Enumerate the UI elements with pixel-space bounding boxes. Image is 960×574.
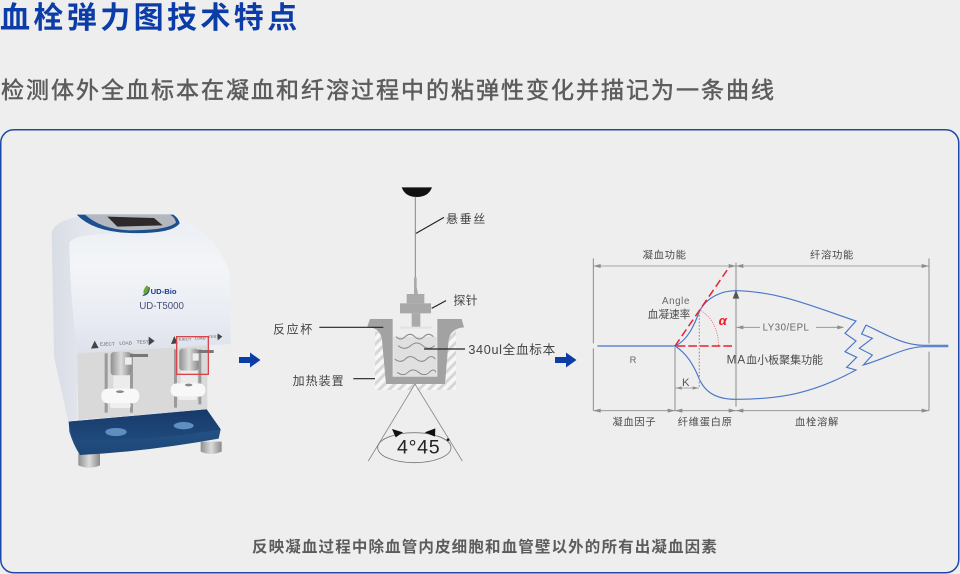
reaction cup [367,319,464,384]
label: MA platelet aggregation: MA血小板聚集功能 [727,353,823,367]
instrument shell [52,217,230,422]
label: clotting factors: 凝血因子 [612,415,656,428]
label: LY30 [737,323,844,334]
instrument screen [107,217,163,227]
instrument screen bezel [77,215,180,233]
leader: heater [353,377,375,380]
caption: 反映凝血过程中除血管内皮细胞和血管壁以外的所有出凝血因素 [252,537,718,556]
label: clot lysis: 血栓溶解 [795,415,839,428]
bottom range arrows [593,409,929,413]
alpha symbol: α [719,313,728,328]
title: 血栓弹力图技术特点 [0,2,301,35]
leader: sample [424,347,465,351]
right button labels: LOAD [195,335,206,340]
right button labels: TEST [209,334,219,339]
red highlight box [177,337,208,374]
leader: probe [432,301,446,308]
TEG curve [597,291,948,399]
right test head [171,349,214,408]
whole-blood sample [393,334,437,377]
base wells [105,422,194,436]
label: K: K [682,377,690,389]
label: probe: 探针 [453,292,478,307]
MA arrowhead [733,290,739,299]
label: angle: Angle [662,296,690,307]
instrument metal front [77,343,207,420]
angle tangent line [675,268,728,346]
oscillation arrows [392,428,449,441]
chart: thromboelastogram [593,249,948,428]
leader: wire [416,217,444,233]
angle arc [701,311,719,345]
probe [400,277,432,329]
label: K [676,377,699,390]
label: LY30: LY30/EPL [763,323,810,334]
diagram: reaction cup schematic [273,187,556,463]
arrow: instrument to schematic [239,352,260,368]
panel: main frame [1,130,959,573]
leader: cup [319,326,383,329]
angle value: 4°45 [397,437,440,459]
label: wire: 悬垂丝 [446,212,487,226]
label: heater: 加热装置 [293,374,345,388]
label: fibrinogen: 纤维蛋白原 [678,415,733,428]
label: coagulation function: 凝血功能 [643,249,687,262]
boundary lines [593,258,929,411]
icon: UD-T5000 instrument [52,215,231,468]
left button labels: EJECT [100,342,115,347]
right button labels [171,333,222,344]
baseline dashed line [677,344,735,348]
logo [143,285,177,296]
oscillation ellipse [378,433,451,463]
K dotted line [698,312,701,388]
suspension wire [414,197,417,277]
label: cup: 反应杯 [273,321,314,336]
right button labels: EJECT [179,337,192,342]
arrow: schematic to chart [555,352,576,368]
heating block [375,332,456,390]
left test head [101,352,148,413]
label: R: R [630,355,637,365]
label: fibrinolysis function: 纤溶功能 [810,249,854,262]
instrument hood [69,228,231,353]
oscillation cone [368,384,462,461]
left button labels: TEST [137,339,149,344]
top range arrows [593,264,929,268]
instrument base [69,409,221,455]
instrument feet [78,442,222,468]
left button labels [91,337,155,349]
label: clotting rate: 血凝速率 [648,308,691,321]
logo: UD-Bio [151,287,177,296]
left button labels: LOAD [119,340,133,345]
label: sample: 340ul全血标本 [468,342,556,357]
suspension head [402,187,432,197]
subtitle: 检测体外全血标本在凝血和纤溶过程中的粘弹性变化并描记为一条曲线 [1,77,776,103]
model label: UD-T5000 [139,301,184,312]
